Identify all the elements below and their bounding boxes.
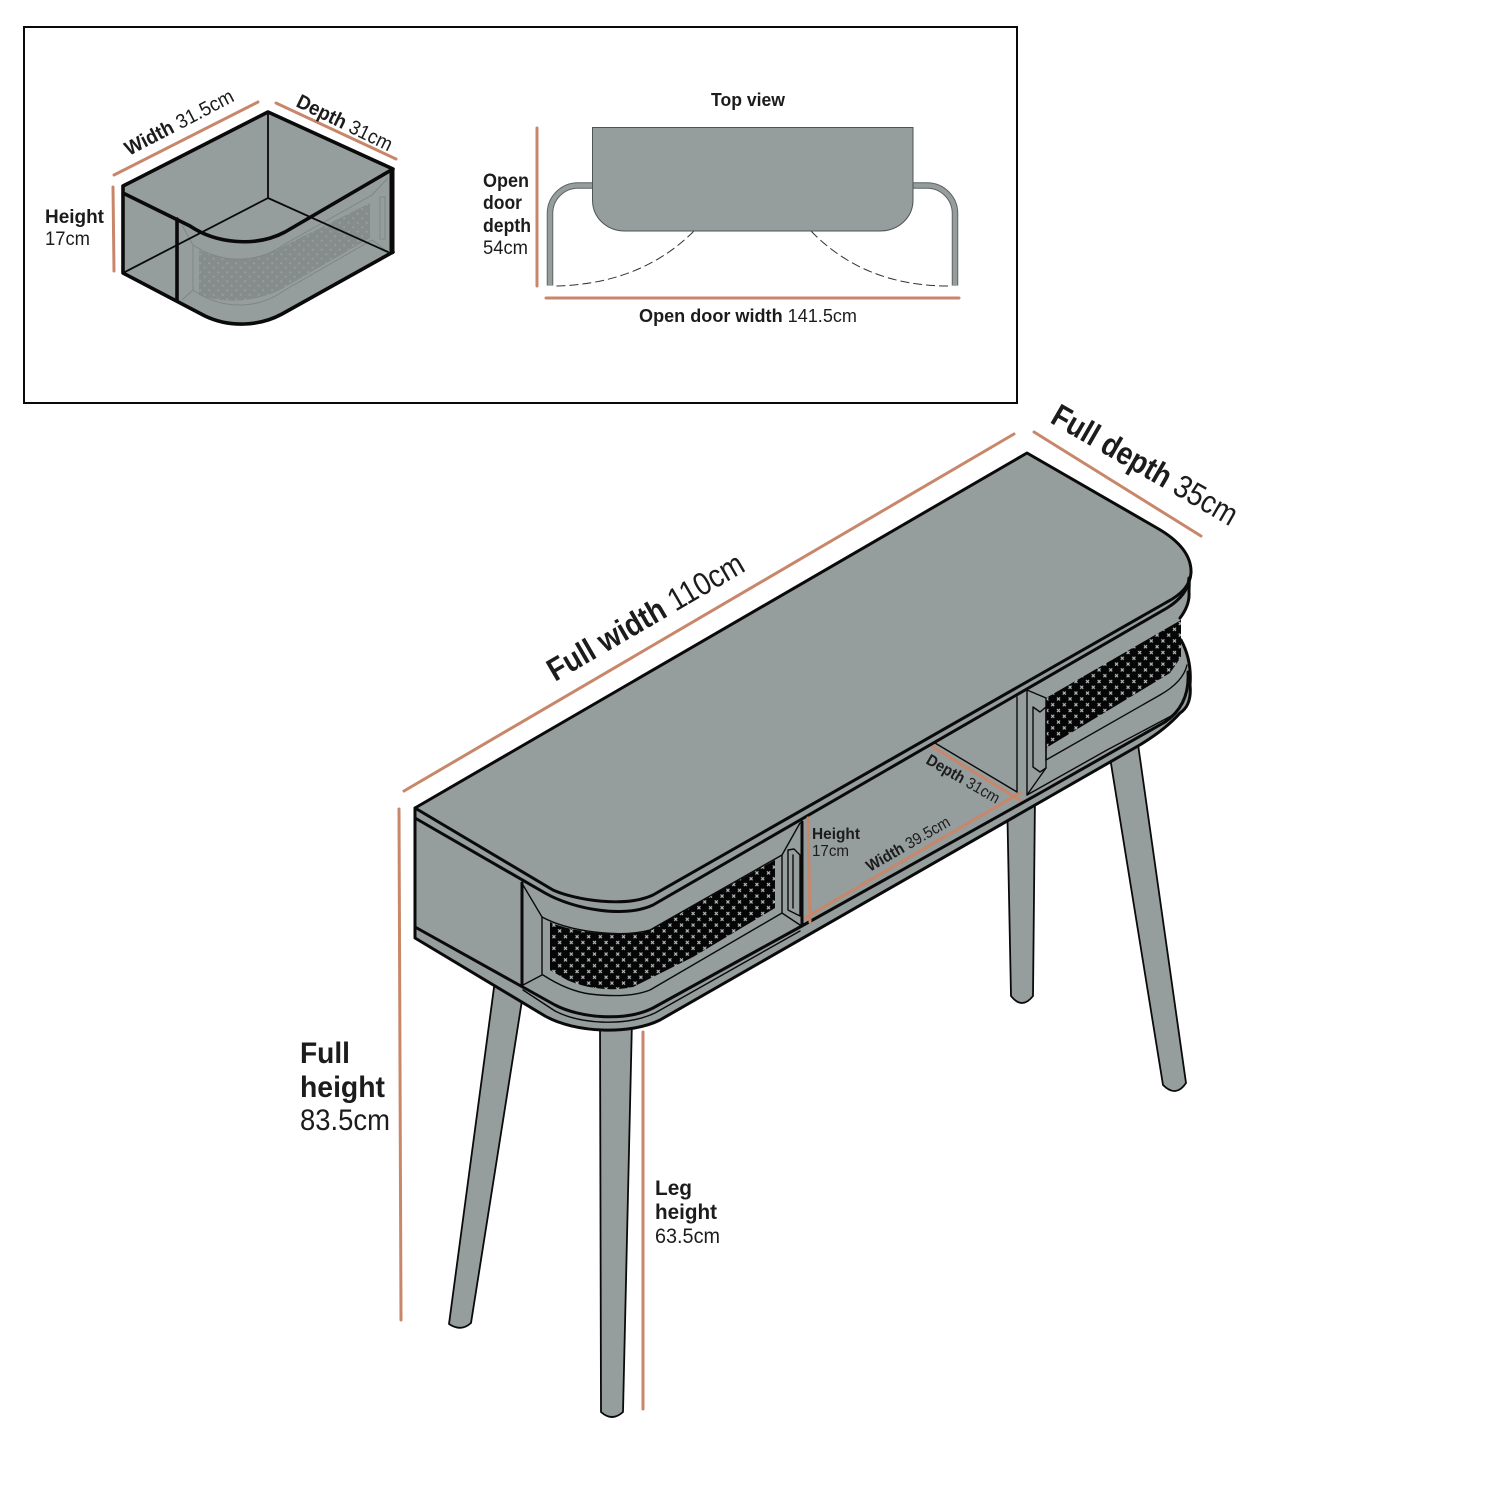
right door mesh (1046, 620, 1181, 748)
dimension: leg height 63.5cm: 63.5cm (655, 1224, 720, 1248)
dimension: height 17cm: 17cm (45, 229, 90, 250)
dimension: full height 83.5cm: Full (300, 1037, 350, 1070)
dimension: depth 31cm: Depth 31cm (293, 91, 396, 156)
dimension: full depth 35cm: Full depth 35cm (1046, 397, 1244, 533)
compartment body (123, 112, 393, 324)
dimension: width 31.5cm (114, 86, 258, 175)
dimension: full height 83.5cm: 83.5cm (300, 1104, 390, 1137)
dimension: leg height 63.5cm (643, 1032, 720, 1409)
dimension: shelf height 17cm: 17cm (812, 843, 849, 860)
dimension: full width 110cm: Full width 110cm (540, 545, 750, 688)
panel: inset with compartment and top view (24, 27, 1017, 403)
left door mesh (550, 860, 775, 989)
left door frame (522, 822, 802, 996)
dimension: height 17cm (45, 187, 114, 271)
dimension: shelf width 39.5cm: Width 39.5cm (864, 814, 953, 875)
dimension: leg height 63.5cm: height (655, 1200, 717, 1224)
dimension: height 17cm: Height (45, 207, 105, 228)
door swing arcs (553, 231, 952, 286)
dimension: open door depth: Open (483, 171, 529, 192)
open doors (550, 186, 955, 286)
dimension: open door depth (483, 128, 537, 286)
dimension: full height 83.5cm (300, 809, 401, 1320)
edge outlines (415, 453, 1191, 1030)
table top plan (592, 128, 913, 231)
leg: back right (1108, 730, 1186, 1091)
body silhouette (415, 453, 1191, 1030)
dimension: open door width: Open door width 141.5cm (639, 305, 857, 326)
dimension: leg height 63.5cm: Leg (655, 1176, 692, 1200)
leg: front centre (600, 1020, 632, 1417)
dimension: shelf height 17cm (808, 818, 861, 922)
dimension: open door depth: depth (483, 216, 531, 237)
table body (415, 453, 1191, 1030)
leg: front left (449, 965, 526, 1328)
dimension: shelf depth 31cm: Depth 31cm (923, 752, 1003, 807)
table legs (449, 730, 1186, 1417)
dimension: open door depth: 54cm (483, 238, 528, 259)
dimension: full width 110cm (404, 434, 1014, 791)
heading: top view: Top view (711, 89, 786, 110)
open shelf and right door frame (935, 665, 1187, 795)
dimension: open door depth: door (483, 193, 523, 214)
dimension: shelf width 39.5cm (805, 793, 1020, 918)
compartment diagram (123, 112, 393, 324)
top view drawing (550, 128, 955, 286)
dimension: width 31.5cm: Width 31.5cm (121, 86, 238, 160)
leg: back centre (1007, 795, 1035, 1003)
faint door and mesh (182, 178, 388, 305)
dimension: full height 83.5cm: height (300, 1071, 385, 1104)
dimension: shelf height 17cm: Height (812, 826, 861, 843)
